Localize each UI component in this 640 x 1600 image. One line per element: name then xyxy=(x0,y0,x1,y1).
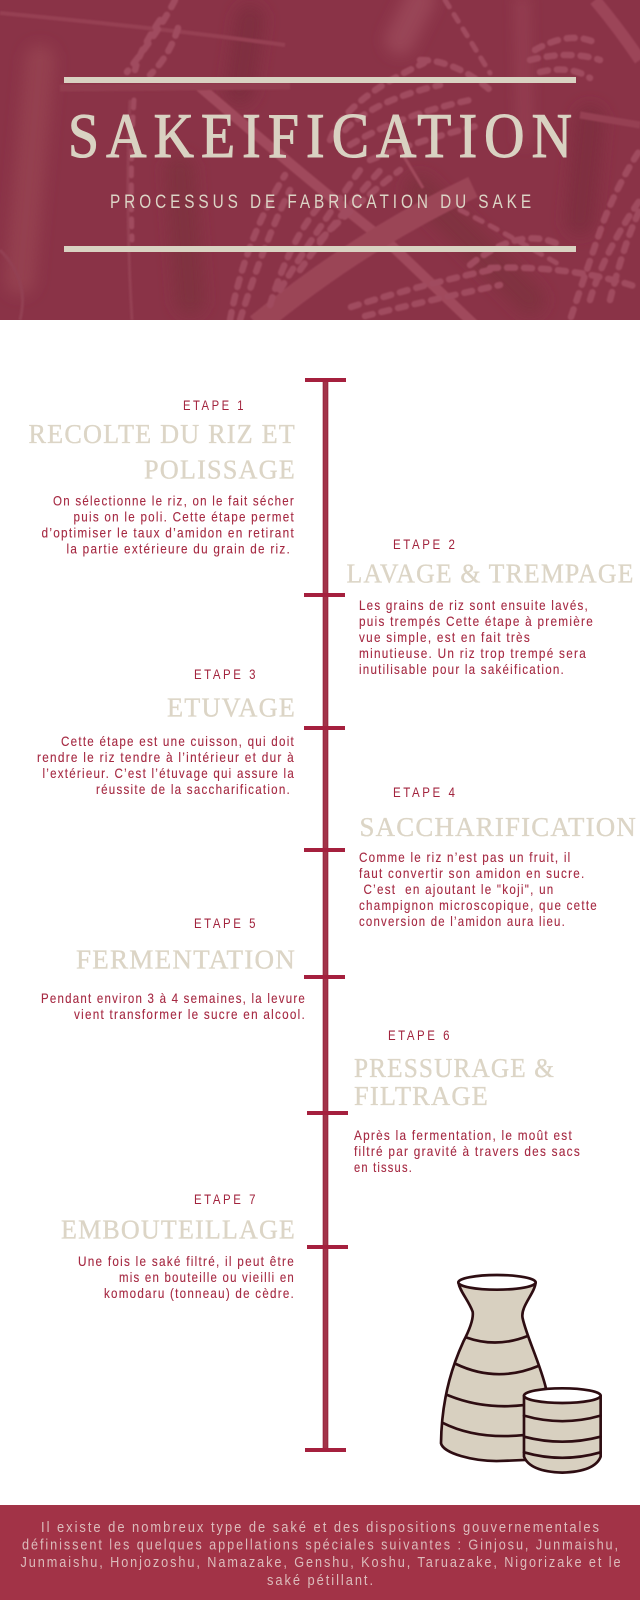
step 6: FILTRAGE xyxy=(354,1081,489,1111)
step 1: POLISSAGE xyxy=(144,454,296,484)
step 3: Cette étape est une cuisson, qui doit xyxy=(61,733,295,749)
step 5: Pendant environ 3 à 4 semaines, la levure xyxy=(41,990,306,1006)
step 7: mis en bouteille ou vieilli en xyxy=(119,1269,295,1285)
step 1: d’optimiser le taux d’amidon en retirant xyxy=(42,524,295,540)
step 4: Comme le riz n’est pas un fruit, il xyxy=(359,849,572,865)
step 4 xyxy=(359,785,637,929)
step 7: komodaru (tonneau) de cèdre. xyxy=(104,1285,295,1301)
step 4: champignon microscopique, que cette xyxy=(359,897,598,913)
step 6: Après la fermentation, le moût est xyxy=(354,1127,573,1143)
step 6: filtré par gravité à travers des sacs xyxy=(354,1143,581,1159)
step 3: réussite de la saccharification. xyxy=(96,781,291,797)
title rule top xyxy=(64,77,576,83)
step 2 xyxy=(346,537,634,677)
step 5: vient transformer le sucre en alcool. xyxy=(74,1006,306,1022)
footer panel xyxy=(0,1505,640,1600)
step 6: en tissus. xyxy=(354,1159,413,1175)
footer panel: saké pétillant. xyxy=(267,1573,375,1589)
step 4: SACCHARIFICATION xyxy=(360,812,637,842)
step 1 xyxy=(28,398,296,556)
header panel: rice photo xyxy=(0,0,640,330)
step 7: Une fois le saké filtré, il peut être xyxy=(78,1253,295,1269)
step 2: inutilisable pour la sakéification. xyxy=(359,661,565,677)
step 1: On sélectionne le riz, on le fait sécher xyxy=(53,492,295,508)
icon: sake bottle and cup xyxy=(441,1275,601,1473)
step 6: PRESSURAGE & xyxy=(354,1053,555,1083)
title: SAKEIFICATION xyxy=(68,101,579,171)
step 4: conversion de l’amidon aura lieu. xyxy=(359,913,566,929)
step 3: rendre le riz tendre à l’intérieur et dur à xyxy=(37,749,295,765)
step 6: ETAPE 6 xyxy=(388,1028,452,1043)
step 1: puis on le poli. Cette étape permet xyxy=(74,508,295,524)
rice panicles xyxy=(127,0,640,320)
step 2: vue simple, est en fait très xyxy=(359,629,531,645)
step 4: C’est en ajoutant le "koji", un xyxy=(364,881,554,897)
step 2: minutieuse. Un riz trop trempé sera xyxy=(359,645,587,661)
step 6 xyxy=(354,1028,581,1175)
title rule bottom xyxy=(64,246,576,252)
timeline xyxy=(304,378,348,1452)
step 5: ETAPE 5 xyxy=(194,916,258,931)
step 3: ETAPE 3 xyxy=(194,667,258,682)
step 7: EMBOUTEILLAGE xyxy=(61,1214,296,1244)
step 4: faut convertir son amidon en sucre. xyxy=(359,865,586,881)
step 4: ETAPE 4 xyxy=(393,785,458,800)
step 3 xyxy=(37,667,296,797)
step 1: RECOLTE DU RIZ ET xyxy=(28,419,296,449)
subtitle: PROCESSUS DE FABRICATION DU SAKE xyxy=(110,191,535,213)
step 5 xyxy=(41,916,306,1022)
step 7 xyxy=(61,1192,296,1301)
step 7: ETAPE 7 xyxy=(194,1192,258,1207)
step 3: ETUVAGE xyxy=(167,692,296,722)
step 2: LAVAGE & TREMPAGE xyxy=(346,558,634,588)
step 1: la partie extérieure du grain de riz. xyxy=(66,540,291,556)
step 2: ETAPE 2 xyxy=(393,537,458,552)
step 5: FERMENTATION xyxy=(76,944,296,974)
step 2: puis trempés Cette étape à première xyxy=(359,613,594,629)
step 1: ETAPE 1 xyxy=(183,398,246,413)
step 3: l’extérieur. C’est l’étuvage qui assure la xyxy=(42,765,295,781)
step 2: Les grains de riz sont ensuite lavés, xyxy=(359,597,589,613)
